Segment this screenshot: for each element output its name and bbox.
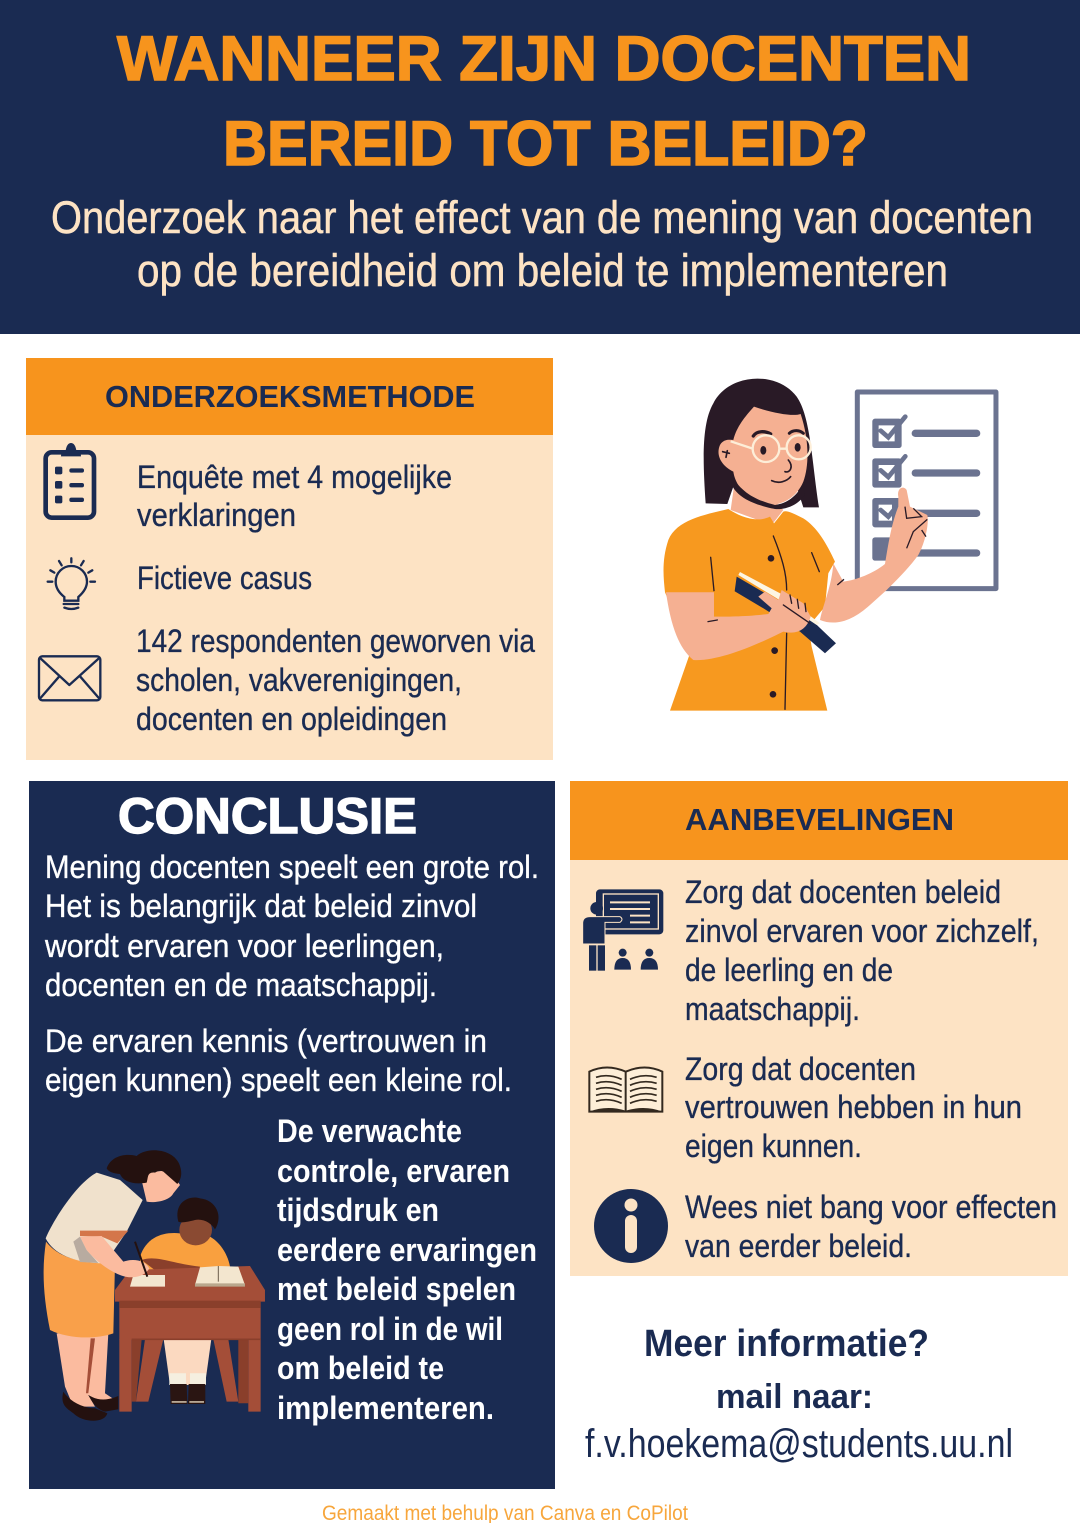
text: ervaren kennis: De ervaren kennis (vertrouwen in: [45, 1023, 487, 1059]
left arm and hand: [666, 590, 811, 660]
subtitle: op de bereidheid om beleid te implementeren: [137, 245, 948, 296]
text: recommendation 2: Zorg dat docenten: [685, 1051, 916, 1087]
text: verwachte controle: om beleid te: [277, 1350, 444, 1386]
text: mening docenten: Mening docenten speelt een grote rol.: [45, 849, 539, 885]
text: verwachte controle: De verwachte: [277, 1113, 462, 1149]
text: verwachte controle: tijdsdruk en: [277, 1192, 439, 1228]
icon: envelope: [39, 656, 100, 700]
icon: information: [594, 1189, 668, 1263]
text: verwachte controle: implementeren.: [277, 1390, 494, 1426]
icon: light bulb: [48, 558, 95, 609]
contact block: f.v.hoekema@students.uu.nl: [585, 1422, 1013, 1466]
text: mening docenten: wordt ervaren voor leerlingen,: [44, 928, 444, 964]
book: [735, 577, 836, 653]
icon: open book: [589, 1067, 662, 1112]
text: recommendation 3: van eerder beleid.: [685, 1228, 912, 1264]
neck and face: [731, 487, 783, 525]
contact block: mail naar:: [716, 1378, 873, 1416]
text: enquete: Enquête met 4 mogelijke: [137, 459, 452, 495]
illustration: teacher with checklist: [664, 379, 996, 711]
beard line: [731, 473, 805, 509]
text: mening docenten: docenten en de maatschappij.: [45, 967, 437, 1003]
text: mening docenten: [44, 849, 539, 1003]
text: recommendation 2: eigen kunnen.: [685, 1128, 862, 1164]
shirt seams and buttons: [711, 536, 819, 709]
teacher legs: [57, 1333, 115, 1407]
text: verwachte controle: eerdere ervaringen: [277, 1232, 537, 1268]
title: [117, 24, 971, 179]
hair back: [704, 379, 819, 507]
illustration: teacher helping pupil: [44, 1150, 265, 1421]
face details: [723, 431, 803, 482]
text: recommendation 2: vertrouwen hebben in hun: [685, 1089, 1022, 1125]
text: verwachte controle: controle, ervaren: [277, 1153, 510, 1189]
text: recommendation 1: zinvol ervaren voor zichzelf,: [685, 913, 1039, 949]
title: WANNEER ZIJN DOCENTEN: [117, 24, 971, 94]
text: mening docenten: Het is belangrijk dat beleid zinvol: [45, 888, 477, 924]
text: fictieve casus: Fictieve casus: [137, 560, 312, 596]
arm: [80, 1236, 149, 1277]
text: verwachte controle: geen rol in de wil: [277, 1311, 503, 1347]
text: respondenten: scholen, vakverenigingen,: [136, 662, 462, 698]
contact block: [585, 1323, 1013, 1466]
text: enquete: verklaringen: [137, 497, 296, 533]
panel: conclusie: [29, 781, 555, 1489]
paper and book: [130, 1275, 165, 1287]
orange shirt: [664, 509, 835, 711]
heading: aanbevelingen: AANBEVELINGEN: [685, 802, 954, 837]
desk: [115, 1266, 265, 1412]
text: verwachte controle: met beleid spelen: [277, 1271, 516, 1307]
text: enquete: [137, 459, 452, 533]
forearm raised: [820, 488, 928, 623]
checklist board: [857, 392, 996, 589]
text: respondenten: 142 respondenten geworven via: [136, 623, 535, 659]
text: respondenten: docenten en opleidingen: [136, 701, 447, 737]
head and hair: [140, 1170, 180, 1202]
heading: onderzoeksmethode: ONDERZOEKSMETHODE: [105, 379, 475, 414]
text: recommendation 3: [685, 1189, 1057, 1264]
text: verwachte controle: [277, 1113, 537, 1426]
subtitle: [51, 192, 1033, 296]
header banner: [0, 0, 1080, 334]
text: recommendation 1: [685, 874, 1039, 1027]
text: recommendation 2: [685, 1051, 1022, 1164]
blouse: [46, 1173, 143, 1263]
skirt: [44, 1242, 115, 1337]
text: ervaren kennis: [45, 1023, 512, 1098]
panel: onderzoeksmethode: [26, 358, 553, 760]
text: recommendation 1: Zorg dat docenten beleid: [685, 874, 1001, 910]
icon: presenter at board: [583, 889, 663, 971]
text: respondenten: [136, 623, 535, 737]
text: recommendation 1: maatschappij.: [685, 991, 860, 1027]
contact block: Meer informatie?: [644, 1323, 929, 1365]
icon: clipboard: [46, 443, 94, 518]
text: recommendation 1: de leerling en de: [685, 952, 893, 988]
pupil: [140, 1198, 230, 1404]
title: BEREID TOT BELEID?: [223, 109, 868, 179]
text: ervaren kennis: eigen kunnen) speelt een kleine rol.: [45, 1062, 512, 1098]
heading: conclusie: CONCLUSIE: [118, 788, 417, 844]
panel: aanbevelingen: [570, 781, 1068, 1276]
